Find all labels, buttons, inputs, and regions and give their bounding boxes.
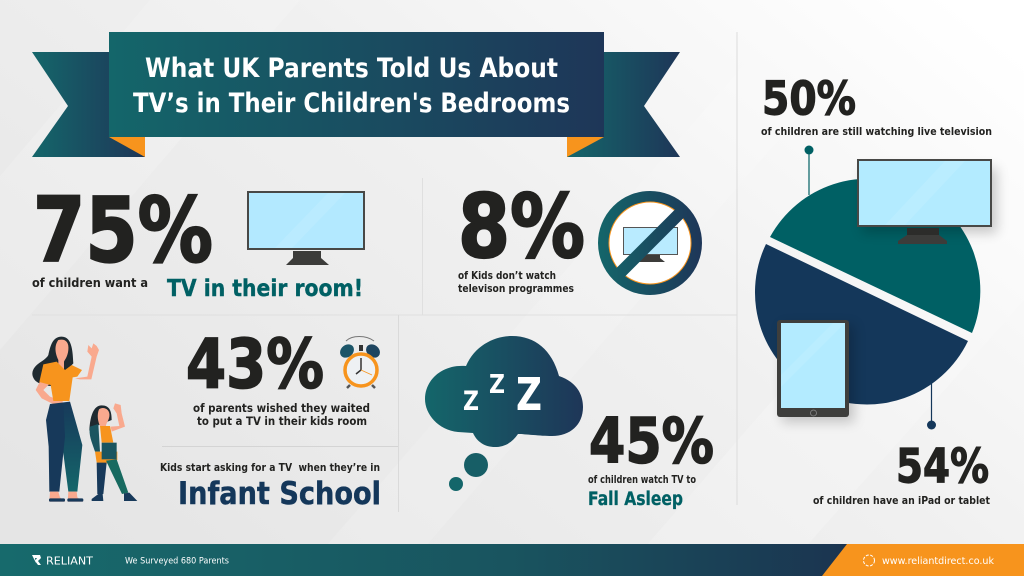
caption: of parents wished they waited — [193, 401, 370, 415]
snore letters — [463, 368, 542, 421]
stat: 54 percent tablet — [813, 440, 990, 507]
highlight text: TV in their room! — [167, 276, 363, 302]
caption: of children are still watching live television — [761, 125, 992, 138]
right orange fold — [567, 137, 604, 157]
highlight text: Infant School — [178, 476, 381, 512]
stat: 8 percent do not watch — [458, 176, 696, 295]
logo: RELIANT — [46, 554, 93, 568]
caption: of Kids don’t watch — [458, 269, 556, 282]
caption: of children have an iPad or tablet — [813, 494, 990, 507]
stat: 43 percent of parents — [186, 324, 383, 428]
icon: television — [248, 192, 364, 265]
stat: 45 percent fall asleep — [588, 404, 714, 510]
right ribbon tail — [567, 52, 680, 157]
icon: large television — [858, 160, 997, 244]
50 percent figure: 50% — [762, 72, 856, 126]
stat: 75 percent want a TV — [32, 178, 364, 302]
43 percent figure: 43% — [186, 324, 324, 404]
title: What UK Parents Told Us About — [145, 53, 558, 84]
stat: 50 percent live television — [761, 72, 992, 138]
caption: televison programmes — [458, 282, 574, 295]
snore letters: Z — [463, 386, 479, 417]
snore letters: Z — [489, 370, 505, 400]
highlight text: Fall Asleep — [588, 489, 683, 510]
75 percent figure: 75% — [33, 178, 213, 282]
orange web panel — [822, 544, 1024, 576]
45 percent figure: 45% — [589, 404, 714, 478]
mother — [32, 337, 99, 502]
icon: no television — [604, 196, 696, 290]
caption: to put a TV in their kids room — [197, 414, 367, 428]
54 percent figure: 54% — [896, 440, 989, 494]
thought bubbles — [449, 453, 488, 491]
caption — [458, 269, 574, 295]
caption — [193, 401, 370, 428]
title banner — [32, 32, 680, 157]
illustration: mother and daughter waving — [32, 337, 137, 502]
website: www.reliantdirect.co.uk — [882, 556, 994, 567]
icon: alarm clock — [337, 336, 383, 388]
pie slice: live television — [770, 179, 980, 333]
title — [133, 53, 570, 119]
icon: tablet — [777, 320, 854, 422]
pie slice: tablet — [755, 244, 968, 404]
snore letters: Z — [516, 368, 542, 421]
survey note: We Surveyed 680 Parents — [125, 556, 230, 566]
left orange fold — [109, 137, 145, 157]
stat: infant school — [160, 461, 381, 512]
pie chart — [755, 146, 997, 430]
banner panel — [109, 32, 604, 137]
caption: of children watch TV to — [588, 473, 696, 486]
caption: of children want a — [32, 276, 148, 290]
leader line: live television — [804, 146, 814, 195]
left ribbon tail — [32, 52, 145, 157]
caption: Kids start asking for a TV when they’re in — [160, 461, 380, 474]
title: TV’s in Their Children's Bedrooms — [133, 88, 570, 119]
8 percent figure: 8% — [458, 176, 585, 278]
icon: sleep cloud — [425, 336, 583, 491]
leader line: tablet — [927, 380, 936, 430]
icon: web globe — [864, 555, 874, 566]
daughter — [89, 403, 137, 501]
footer bar — [0, 544, 1024, 576]
